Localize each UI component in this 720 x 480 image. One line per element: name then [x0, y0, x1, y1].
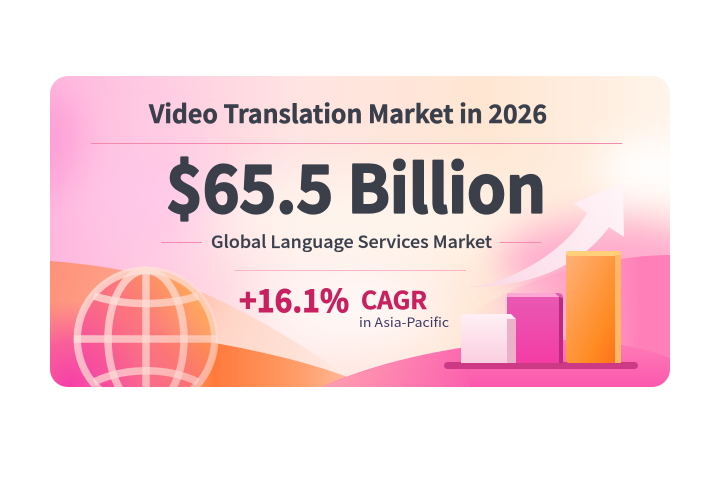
title: Video Translation Market in 2026: [148, 95, 547, 131]
divider: below subtitle: [235, 270, 466, 271]
panel: gradient card: [50, 76, 670, 387]
arrow: growth: [467, 183, 624, 287]
left background hill: [50, 261, 330, 387]
chart baseline: [444, 362, 638, 369]
bar: tall orange: [566, 251, 621, 363]
front pink hill: [322, 340, 670, 387]
bar: medium magenta: [507, 293, 563, 363]
headline value: $65.5 Billion: [166, 138, 546, 232]
subtitle: Global Language Services Market: [211, 228, 492, 253]
bar: small pale: [461, 314, 516, 363]
CAGR label: CAGR: [361, 281, 427, 316]
right background hill: [490, 255, 670, 387]
divider: title: [91, 143, 622, 144]
divider: right of subtitle: [500, 242, 541, 243]
bar chart: [444, 251, 638, 369]
icon: globe: [74, 266, 218, 387]
growth rate: +16.1%: [239, 276, 349, 321]
divider: left of subtitle: [161, 242, 202, 243]
orange hill: [160, 334, 347, 387]
region label: in Asia-Pacific: [359, 312, 449, 331]
infographic: [50, 76, 670, 387]
